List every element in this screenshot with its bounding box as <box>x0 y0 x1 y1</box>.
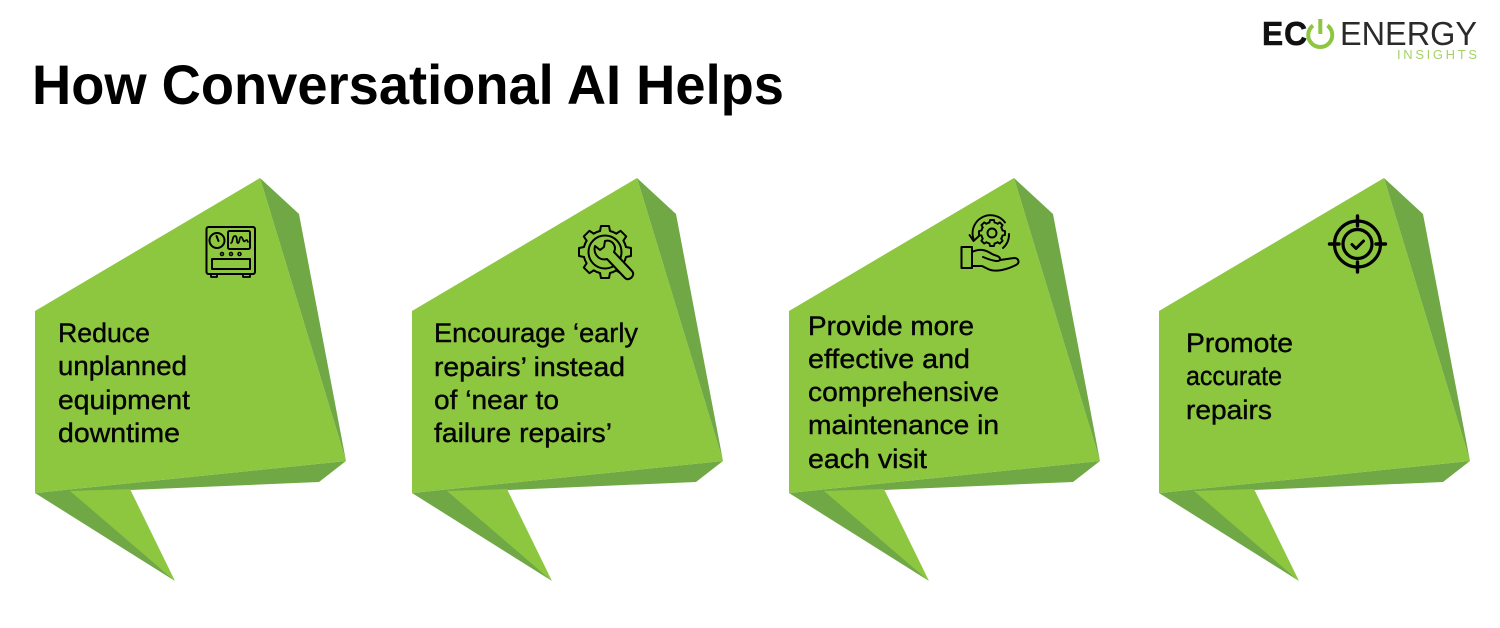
text: provide more effective maintenance: maintenance in <box>808 410 999 440</box>
panel: accurate repairs <box>1159 178 1470 581</box>
text: reduce unplanned equipment downtime <box>58 318 191 448</box>
speech bubble shape <box>1159 178 1470 581</box>
icon: control panel gauge <box>206 227 255 277</box>
text: provide more effective maintenance <box>808 311 999 474</box>
icon: gear and wrench <box>579 226 633 279</box>
text: encourage early repairs: repairs’ instead <box>434 352 625 382</box>
logo: Eco Energy Insights <box>1262 15 1477 62</box>
text: reduce unplanned equipment downtime: equipment <box>58 385 191 415</box>
title: How Conversational AI Helps <box>32 53 784 116</box>
text: encourage early repairs: failure repairs’ <box>434 418 612 448</box>
icon: target with check <box>1330 216 1386 272</box>
speech bubble shape <box>35 178 346 581</box>
text: promote accurate repairs: repairs <box>1186 395 1272 425</box>
text: encourage early repairs <box>434 318 638 448</box>
logo: Eco Energy Insights: INSIGHTS <box>1397 47 1477 62</box>
panel: early repairs <box>412 178 723 581</box>
text: reduce unplanned equipment downtime: unplanned <box>58 351 187 381</box>
text: promote accurate repairs: accurate <box>1186 361 1282 391</box>
text: provide more effective maintenance: comprehensive <box>808 377 999 407</box>
logo: Eco Energy Insights: EC <box>1262 15 1308 52</box>
text: provide more effective maintenance: each visit <box>808 444 928 474</box>
text: reduce unplanned equipment downtime: Reduce <box>58 318 150 348</box>
text: reduce unplanned equipment downtime: downtime <box>58 418 180 448</box>
text: provide more effective maintenance: Provide more <box>808 311 974 341</box>
panel: effective maintenance <box>789 178 1100 581</box>
logo: Eco Energy Insights: ENERGY <box>1340 15 1477 52</box>
text: provide more effective maintenance: effective and <box>808 344 970 374</box>
icon: hand with gear <box>962 215 1018 271</box>
text: promote accurate repairs: Promote <box>1186 328 1293 358</box>
speech bubble shape <box>789 178 1100 581</box>
text: promote accurate repairs <box>1186 328 1293 425</box>
panel: reduce unplanned downtime <box>35 178 346 581</box>
speech bubble shape <box>412 178 723 581</box>
text: encourage early repairs: of ‘near to <box>434 385 559 415</box>
text: encourage early repairs: Encourage ‘early <box>434 318 638 348</box>
